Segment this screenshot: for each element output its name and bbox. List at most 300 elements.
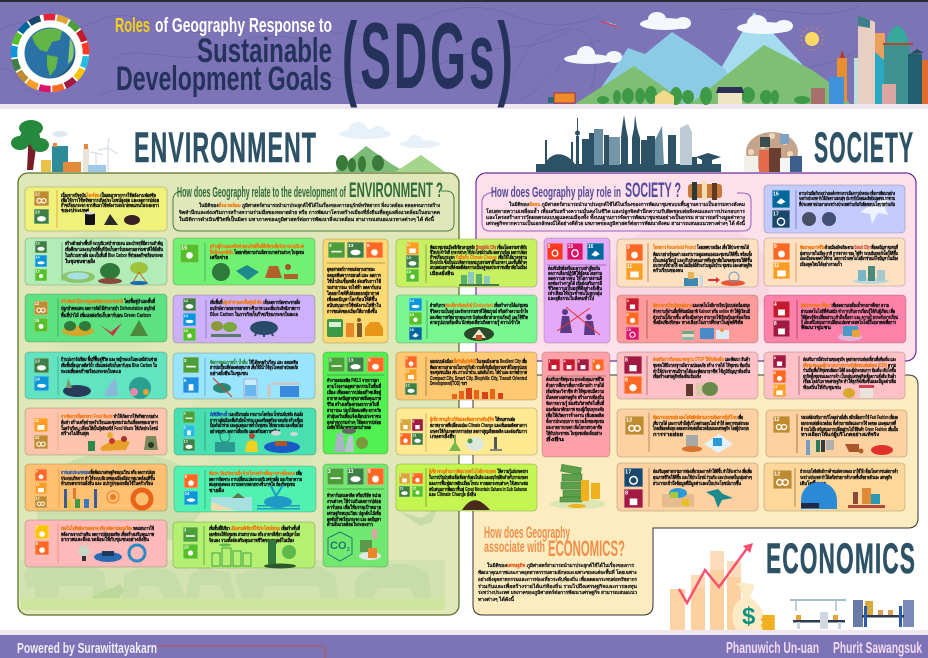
card: soil and desert: และการฟื้นฟูสภาพดินเสื่อมโทรม จากผลกระทบต่างๆ ให้เหมาะสม [429,478,528,488]
card: marine Blue Carbon: เพิ่มพื้นที่อนุบาลสัตว์น้ำ เพิ่มแหล่งกักเก็บคาร์บอน Blue Carbon ใน [61,360,157,369]
title [115,3,516,108]
card: Food Waste: ในครัวเรือน เปลี่ยนให้เป็นปุ๋ยอินทรีย์ Food Waste ให้เกิดประโยชน์ [61,424,158,432]
card: SDG 12 fossil resources: 12 [35,192,40,197]
card: disasters and climate: 6 [184,426,186,430]
card: Smart City: เมืองยุคใหม่ได้อย่างรวดเร็ว [800,260,842,268]
card: sustainable transport: ลดมลพิษจากรถยนต์ และ ลดการ [327,272,381,279]
card: Food Waste: การจัดการเรื่องอาหาร Food Waste ทำให้เกิดการใช้ทรัพยากรอย่าง [61,412,158,420]
card: Ecotourism: 15 [410,312,415,317]
card: beaches and marine: 9 [185,474,188,479]
card: Green Carbon forests: พื้นที่ป่าไม้ เพิ่มแหล่งกักเก็บคาร์บอน Green Carbon [61,310,151,319]
card: mangroves: 13 [184,298,189,303]
card: green cities: เพิ่มพื้นที่สีเขียว เมืองสวนสีเขียวที่ใช้ประโยชน์ทุกมุม เพื่อสร้างพื้นที่ [209,523,300,532]
card: soil and desert: 2 [400,473,402,477]
environment question: ในมิติของสิ่งแวดล้อม ภูมิศาสตร์สามารถนำมาประยุกต์ใช้ได้ในเรื่องของการอนุรักษ์ทรัพยากร สิ่งแวดล้อม ตลอดจนการสร้าง [199,201,441,210]
header banner [0,0,928,109]
card: community waste and market: เพื่อสร้างเศรษฐกิจท้องถิ่นเข้มแข็ง [653,372,701,380]
card: air pollution: ทำงานลดมลพิษ PM2.5 จากการเผา [327,377,379,384]
card: SDG 12 fossil resources: 13 [35,210,40,215]
card: Food Waste [25,408,167,455]
card: Blue Carbon wetlands: 13 [36,242,40,246]
card: Biophilic City: พัฒนาชุมชนเมืองสีเขียวตามหลัก Biophilic City เชื่อมโยงธรรมชาติกับ [430,243,527,251]
card: Green Carbon forests [25,294,167,342]
banner city skyline [829,15,928,104]
card: digital learning: พัฒนาระบบการศึกษา เพื่อลดความเหลื่อมล้ำทางการศึกษา ความ [801,300,889,309]
card: digital learning: พัฒนาชุมชน [801,324,832,331]
card: Blue Carbon wetlands: 15 [36,270,40,274]
card: sustainable transport: 9 [367,243,370,249]
card: mangroves: Blue Carbon ในการกักเก็บก๊าซเรือนกระจกในทะเล [210,310,298,318]
card: household project: 9 [627,245,630,251]
banner landscape illustration [548,12,850,105]
card: beaches and marine: ลดการกัดเซาะ การเปลี่ยนแปลงระบบนิเวศชายฝั่ง และรักษาความ [209,475,302,483]
card: renewable energy: พลังงานจากถ่านหิน ลดการปล่อยมลพิษ เพื่อสร้างเสริมคุณภาพ [61,530,154,538]
card: SDG 15 land use: สร้างผู้นำและเครือข่ายอนุรักษ์พื้นที่สีเขียวเพื่อรักษาระบบนิเวศ [210,241,305,251]
card: water and health: จัดการคุณภาพน้ำ น้ำดื่ม ใช้ได้ทุกครัวเรือน และ ลดมลพิษ [210,357,298,366]
card: Biophilic City: แบบผสมผสานที่ส่งผลดีต่อความเป็นอยู่ของประชาชนที่อาศัยในเมือง [430,263,527,272]
economics question: ร่วมกันและเพื่อสร้างรายได้แก่ท้องถิ่น รวมไปถึงเศรษฐกิจและการลงทุน [478,582,638,590]
card: renewable energy [25,520,167,567]
card: education and work: ให้กับประชาชน ในชุมชนท้องถิ่นอย่าง [546,429,602,437]
card: peace and institutions: 17 [773,211,779,217]
card: SDG 15 land use: เครือข่าย [210,254,228,261]
card: soil and desert: 15 [413,486,416,490]
card: disasters and climate: 3 [184,412,186,416]
card: Green Fashion: 12 [774,417,780,423]
card: community waste and market [617,352,758,399]
card: Resilient City: 11 [406,370,409,374]
economics question: ทางต่างๆ ได้ดังนี้ [478,594,515,603]
card: circular economy and recycling [25,464,167,511]
title: Roles [115,15,150,37]
card: gender and inequality: เท่าเทียมให้ประชาชนในทุกกลุ่ม [548,290,602,297]
environment question: จิตสำนึกและส่งเสริมการสร้างความร่วมมือของหลายฝ่าย หรือ การพัฒนาโครงสร้างเมืองที่ยั่งยืนเพื่อดูแลสิ่งแวดล้อมในอนาคต [179,208,440,217]
card: global trade: 12 [774,472,780,478]
card: Biophilic City: เมืองยั่งยืน [430,269,455,277]
card: household project [617,239,758,287]
card: ASEAN and trade geography [617,463,758,511]
icon: money bag and coins [732,583,775,630]
icon: mountains and clouds [335,122,445,172]
card: Resilient City: Compact City, Smart City, Biophilic City, Transit Oriented [430,376,527,382]
card: climate research: เกษตรให้กับเกษตรกรรายย่อย ลดการสูญเสียผลผลิต และส่งเสริมการ [430,428,527,436]
card: global trade: เติบโตขึ้นมาก [800,478,826,487]
card: marine Blue Carbon [25,352,167,399]
card: beaches and marine: พัฒนา ป้องกันชายฝั่ง ด้วยโครงสร้างพื้นฐานชายฝั่งทะเล เพื่อ [209,468,302,477]
card: Ecotourism [396,295,537,343]
card: SDG 12 fossil resources: เพื่อให้การใช้ทรัพยากรเกิดประโยชน์สูงสุด และลดการปล่อย [61,196,159,205]
card: carbon neutrality: 2 [347,547,350,553]
card: CSR and community business: ท้องถิ่นให้กับชุมชน [803,383,842,391]
footer bar: Powered by Surawittayakarn [17,640,157,657]
card: air pollution: ชีวิต สร้างเครื่องกรองอากาศในที่ [327,400,380,408]
card: air pollution [323,352,388,454]
card: community waste and market: ทำให้ประชาชนมีรายได้และพัฒนาอาชีพ ใช้ภูมิปัญญาท้องถิ่น [653,367,750,376]
card: disasters and climate: ป้องกันน้ำท่วม และดูแลคุณภาพน้ำในชุมชน ให้เหมาะสม และเชื่อมโยง [210,420,303,430]
card: ASEAN and trade geography: 17 [625,470,631,476]
card: CSR and community business: 9 [774,370,777,375]
card: air pollution: มลพิษให้ได้มาตรฐานตามกำหนด [327,424,371,431]
card: carbon neutrality: ดูดซับก๊าซเรือนกระจก และ ลดปัญหา [327,516,381,524]
card: SDG 12 fossil resources [25,187,167,231]
environment question: How does Geography relate to the development of [177,184,346,201]
card: peace and institutions: 16 [773,191,779,197]
card: Green Fashion: ทางเลือกให้แก่ผู้บริโภคอย่างแท้จริง [801,431,880,439]
card: Biophilic City [396,239,537,287]
card: household project: พัฒนาอย่างรู้คุณค่า และสามารถดูแลตนเองและชุมชนให้ดีขึ้น พร้อมทั้ง [653,249,752,259]
card: Blue Carbon wetlands: ในชุมชนชายฝั่ง [65,257,95,265]
card: Smart City: 9 [774,244,777,250]
card: ASEAN and trade geography: สามารถเข้าถึงข้อมูลที่มีมูลค่าและเป็นประโยชน์มากขึ้น [653,478,741,488]
card: renewable energy: เทคโนโลยีพลังงานสะอาด หรือ พลังงานหมุนเวียน ทดแทนการใช้ [61,525,154,532]
card: carbon neutrality: ด้านสิ่งแวดล้อมในระยะยาว [327,520,373,528]
card: Biophilic City: 15 [407,269,412,274]
card: CSR and community business: เพื่อชุมชนและผู้ประกอบการความรับผิดชอบต่อสังคม (CSR) ความ [803,361,896,370]
card: CSR and community business: เชื่อมโยงกับภาคเศรษฐกิจ ทำให้ธุรกิจเพิ่มขึ้นและมีมูลค่าเพิ่ม [803,376,896,386]
card: Ecotourism: และจัดการทรัพยากรคุณภาพ นักท่องเที่ยวสามารถเรียนรู้ และใช้ชีวิต [430,313,528,322]
card: Ecotourism: 14 [410,298,415,303]
footer bar: Phanuwich Un-uan [726,640,819,657]
footer bar [0,630,928,658]
card: sustainable transport: เพื่อลดปัญหาโลกร้อนให้ดีขึ้น [327,294,377,303]
card: production and logistics: เพิ่มรายได้ และการเข้าถึงผู้บริโภคผ่านออนไลน์ ทำให้ ลดการขนส่งระยะ [653,419,749,428]
icon: money bag and coins: $ [742,603,756,630]
card: circular economy and recycling: การแยกประเภทขยะเพื่อพัฒนาเศรษฐกิจหมุนเวียน หรือ ลดการปล่อย [61,468,155,476]
card: sustainable transport: สนับสนุนการใช้พลังงานไฟฟ้าใน [327,302,381,309]
card: carbon neutrality: คาร์บอน เพื่อให้บรรลุเป้าหมาย [327,503,381,511]
card: climate research: 13 [413,433,416,438]
card: education technology: ทั้งยังเพิ่มทักษะ ทางเลือกในการศึกษาในยุคดิจิทัล [653,317,743,326]
card: mangroves: เพิ่มพื้นที่ปลูกป่าชายเลนฟื้นฟูหน้าดิน เพื่อลดการกัดเซาะชายฝั่ง [210,297,300,307]
card: Food Waste: สร้างไม่สิ้นสุด [61,428,89,437]
card: Biophilic City: 11 [407,242,412,247]
economics question: How does Geography [484,523,570,542]
card: community waste and market: ชุมชนให้มีมาตรฐานมีความปลอดภัย สร้าง รายได้ ให้ชุมชน ท้องถิ่น [653,361,750,369]
card: education and work: และพัฒนาศักยภาพ ของผู้เรียนทุกระดับ [546,406,604,414]
card: marine Blue Carbon: บ้านปะการังเทียม พื้นที่ฟื้นฟูชีวิต และ หญ้าทะเลในทะเลมีส่วนช่วย [61,354,157,364]
card: SDG 12 fossil resources: ก๊าซเรือนกระจก ควรหันมาใช้พลังงานสะอาดทดแทนในระยะยาว [61,202,159,209]
card: education and work: ทั้งการประกอบการ ขนาดเล็กของชุมชน [546,416,604,425]
card: Green Fashion [766,410,907,457]
card: water and health: 6 [184,378,187,384]
card: sustainable transport: 13 [348,243,354,249]
card: climate research: สภาพอากาศที่เปลี่ยนแปลง Climate Change และเพิ่มผลผลิตทางการ [430,421,527,429]
card: circular economy and recycling: 12 [36,497,40,501]
chart: rising economy bars and arrow [670,543,753,630]
card: global trade [764,463,905,511]
card: CSR and community business: 11 [774,384,779,389]
card: beaches and marine [174,466,316,512]
card: education and work: เพิ่มทักษะวิชาชีพ ทำให้ชุมชนมีความ [546,387,604,395]
environment question: ENVIRONMENT ? [349,179,443,202]
card: household project: เป็นแหล่งเรียนรู้ และปรับปรุงคุณภาพที่อยู่อาศัยในเขตชุมชนให้ดีขึ้น [653,255,752,265]
card: education and work: เพื่อให้เกิดการจ้างงาน เพิ่มผลผลิต [546,411,604,419]
card: sustainable transport [323,239,388,343]
card: education and work: ด้วยการศึกษาเพื่อการมีงานทำ รายได้ [546,381,604,389]
card: production and logistics: ไกลเพื่อลดต้นทุน ลดผลกระทบต่อสิ่งแวดล้อมและเศรษฐกิจ โดยผู้ประกอบ [652,424,749,433]
card: gender and inequality: ลดความยากจน ให้โอกาสงานดี [548,275,602,282]
card: education and work: 1 [549,360,551,364]
card: Biophilic City: Biophilia ซึ่งเป็นแนวคิดการออกแบบธรรมชาติในอาคาร และพื้นที่ต่างๆ [430,257,527,266]
card: carbon neutrality [323,464,388,567]
card: climate research: ผู้เชี่ยวชาญด้านวิจัยและพัฒนาสายพันธุ์พืช ให้ทนทานต่อ [430,415,515,424]
card: air pollution: ค่าฝุ่นควันเพื่อแจ้งเตือนประชาชน [327,412,381,420]
card: renewable energy: อากาศและสิ่งแวดล้อมให้กับชุมชนอย่างยั่งยืน [61,535,150,543]
card: education technology: 10 [627,327,631,332]
card: Ecotourism: 16 [410,327,415,332]
card: air pollution: สาธารณะ ปลูกไม้ลดมลพิษ ตรวจวัด [327,407,381,415]
society question: เศรษฐกิจจากความเป็นเอกลักษณ์ได้อย่างดีด้วย มหภาคของภูมิศาสตร์ต่อการพัฒนาสังคม สามารถเสนอแนวทางต่างๆ ได้ ดังนี้ [486,218,746,228]
card: Smart City: พัฒนาคุณภาพชีวิตด้วยเมืองอัจฉริยะตาม Smart City เพื่อลดปัญหาชุมชนที่ [800,243,898,251]
card: green cities: ออกซิเจนให้กับชุมชน สวนสาธารณะ หรือ อาคารสีเขียว ลดปัญหาโลก [209,531,300,538]
icon: money and gold coins [550,464,606,509]
card: air pollution: ตามโรงงานอุตสาหกรรมในพื้นที่ [327,381,382,390]
card: Food Waste: 11 [35,418,40,423]
card: gender and inequality: 5 [548,244,551,250]
card: education technology [617,295,758,343]
card: sustainable transport: รถสาธารณะ รถไฟฟ้า ลดคาร์บอน [327,284,381,291]
title: of Geography Response to [155,15,332,37]
card: disasters and climate: ภัยพิบัติทางน้ำ และปริมาณฝน จากภาวะโลกร้อน น้ำท่วมฉับพลัน ฝนแล้ง [210,409,303,418]
card: air pollution: 3 [329,358,332,363]
card: gender and inequality: 16 [588,244,594,250]
panel: society [476,173,916,361]
card: education technology: ส่วนร่วมได้มากขึ้น เครื่องมือต่างๆ สามารถใช้เรียนรู้นอกห้องเรียน [653,312,750,322]
card: community waste and market: ส่งเสริมการรับรองมาตรฐาน OTOP ให้กับท้องถิ่น และพัฒนา สินค้า [653,355,750,363]
icon: factory lines [790,599,914,629]
card: disasters and climate: อย่างชุมชน ลดการเสี่ยงภัย และเตรียมความพร้อม [210,427,280,435]
card: CSR and community business [764,352,905,399]
society question: และโครงสร้างการวัดผลตรงแบบดูแลคนเมืองทั้ง ทั้งบนฐานการจัดการพัฒนาชุมชนอย่างเป็นธรรม สามารถสร้างมูลค่าทาง [486,212,746,222]
card: soil and desert: 9 [413,473,415,477]
card: peace and institutions [764,185,905,233]
card: Green Carbon forests: ปลูกป่าทดแทน ลดการตัดไม้ทำลายป่า Deforestation อนุรักษ์ [61,305,155,313]
panel: economics [473,375,918,615]
card: Resilient City: พัฒนาความสามารถในการปรับตัว รวมทั้งรับมือภัยธรรมชาติในทุกรูปแบบ [430,362,527,372]
card: Food Waste: 12 [35,435,40,440]
card: soil and desert: และ Climate Change ยั่งยืน [429,490,476,498]
icon: crowd of people [744,132,802,172]
card: education technology: พัฒนาการเรียนรู้ทุกกลุ่มอายุ และเทคโนโลยีการเรียนรู้แบบต่อเนื่องสนุก [653,301,750,310]
card: education and work [542,352,610,457]
card: green cities [173,522,315,568]
card: green cities: 15 [184,545,189,550]
card: gender and inequality: และยุติธรรมในสังคมทั่วไป [548,294,594,302]
card: soil and desert: ในการปรับปรุงดินเพื่อเพิ่มคาร์บอนในดิน และอนุรักษ์ดินสำหรับการเกษตร [429,473,528,481]
card: circular economy and recycling: 9 [36,470,38,474]
society question: โอบสลายความเหลื่อมล้ำ เพื่อเสริมสร้างความมั่นคงในชีวิต และปลูกจิตสำนึกความรับผิดชอบต่อสังคมและการประกอบการ [485,206,745,216]
heading: ENVIRONMENT: ENVIRONMENT [134,124,317,172]
environment question: ในมิติการดำเนินชีวิตที่เป็นมิตร มหาภาคของภูมิศาสตร์ต่อการพัฒนาสิ่งแวดล้อม สามารถเสนอแนวทางต่างๆ ได้ ดังนี้ [179,214,435,224]
card: air pollution: อากาศ ลดปัญหาสุขภาพเพิ่มคุณภาพ [327,394,381,402]
card: mangroves: 15 [184,328,189,333]
card: climate research [396,408,537,455]
card: mangroves: 14 [184,313,189,318]
card: mangroves: อนุรักษ์ความหลากหลายทางชีวภาพ และเพิ่มประสิทธิภาพการ [210,304,300,312]
card: household project: แนวทางนี้ช่วยให้ คนในเมืองมีส่วนร่วมดูแลบ้าน ชุมชน และเศรษฐกิจ [653,260,752,270]
card: ASEAN and trade geography: 8 [625,491,628,497]
card: education technology: 4 [627,298,630,303]
society question: SOCIETY ? [625,179,681,202]
environment question [173,179,454,231]
card: gender and inequality: ส่งเสริมสิทธิสตรีและความเท่าเทียมกัน [548,265,600,272]
card: community waste and market: 8 [625,357,628,363]
card: education and work: ยั่งยืน [546,435,565,443]
economics question [478,523,638,603]
card: production and logistics: การรายย่อย [653,431,683,438]
card: SDG 15 land use [173,238,315,285]
card: beaches and marine: ชายฝั่ง [209,486,225,494]
card: air pollution: 9 [368,358,371,363]
card: water and health: อย่างยั่งยืนในชุมชน [210,369,249,377]
card: production and logistics: พัฒนาระบบขนส่ง และโลจิสติกส์ตามความต้องการผู้บริโภค เพื่อ [653,413,743,422]
card: Ecotourism: สำหรับการท่องเที่ยวเชิงอนุรักษ์ (Ecotourism) เพื่อสร้างรายได้แก่ชุมชน [430,301,528,309]
card: carbon neutrality: เศรษฐกิจหมุนเวียน ปลูกต้นไม้เพื่อ [327,509,381,518]
card: education and work: และภาคการเกษตร เพิ่มโอกาสทางอาชีพ [546,423,602,431]
icon: skyline silhouette [536,115,721,172]
card: beaches and marine: 14 [185,491,190,496]
economics question: พัฒนาคุณภาพและภาคอุตสาหกรรมตามลักษณะเฉพาะของแต่ละพื้นที่ โดยเฉพาะ [478,567,637,576]
card: air pollution: อุตสาหกรรมต่างๆ ให้ลดการปล่อย [327,419,381,426]
society question: ในมิติของสังคม ภูมิศาสตร์สามารถนำมาประยุกต์ใช้ได้ในเรื่องของการพัฒนาชุมชนบนพื้นฐานความเป็นธรรมทางสังคม [509,199,745,209]
card: carbon neutrality: 13 [348,469,354,475]
card: Blue Carbon wetlands: สร้างตัวอย่างพื้นที่ ระบบนิเวศป่าชายเลน และป่าพรุที่มีความสำคัญ [65,238,164,247]
card: Blue Carbon wetlands: เพื่อศึกษาและอนุรักษ์พื้นที่กักเก็บคาร์บอนตามธรรมชาติให้ยั่งยืน [65,244,163,253]
card: Green Carbon forests: สร้างจิตสำนึกการดูแลทรัพยากรธรรมชาติ โดยฟื้นฟูป่าและพื้นที่ [61,296,155,306]
icon: SDG globe [0,2,101,104]
card: carbon neutrality: ทำคาร์บอนเครดิต หรือบริษัท หน่วย [327,492,381,499]
card: Resilient City: 9 [406,357,408,361]
card: sustainable transport: 3 [329,243,332,249]
card: renewable energy: 7 [36,525,39,530]
card: disasters and climate: 13 [184,440,188,444]
card: Smart City [764,238,905,286]
card: carbon neutrality: 3 [328,469,331,475]
society question [482,179,751,231]
title: (SDGs) [342,3,516,108]
card: soil and desert: 13 [400,486,403,490]
card: Resilient City: ออกแบบผังเมืองเพื่อรับมือภัยพิบัติในเขตเมืองตาม Resilient City เพื่อ [430,357,527,365]
card: marine Blue Carbon: 14 [35,377,40,382]
card: circular economy and recycling: ทำเกษตรกรรมยั่งยืน และ แปรรูปของเหลือใช้ในครัวเรือน [61,479,153,488]
card: digital learning: 4 [774,302,777,308]
card: production and logistics: 12 [626,418,632,424]
card: SDG 15 land use: พื้นที่เกษตรยั่งยืน โดยอาศัยความร่วมมือจากภาคส่วนต่างๆ ในชุมชน [210,247,304,256]
economics question: associate with [484,539,545,556]
card: gender and inequality: ลดช่องว่างรายได้ เพื่อส่งเสริมการมี [548,279,602,287]
card: Blue Carbon wetlands [25,238,167,285]
card: water and health: 3 [184,358,187,364]
card: climate research: 8 [413,419,414,424]
card: marine Blue Carbon: ทะเลเพื่อลดก๊าซเรือนกระจกในทะเล [61,367,121,375]
card: sustainable transport: ใช้น้ำมันเชื้อเพลิง ส่งเสริมการใช้ [327,276,381,285]
card: Blue Carbon wetlands: 14 [36,256,40,260]
card: water and health: สารปนเปื้อนที่ส่งผลต่อสุขภาพ เพื่อให้มีน้ำใช้อุปโภคอย่างปลอดภัย [210,362,298,371]
card: Resilient City: Development(TOD) ฯลฯ [430,381,467,387]
card: Food Waste: คุ้มค่า สร้างเครือข่ายครัวเรือนและชุมชนร่วมกันเพื่อลดขยะอาหาร [61,418,158,426]
card: gender and inequality: ชีวิตความเป็นอยู่ที่ดีอย่างยั่งยืน [548,284,602,293]
card: sustainable transport: ไดออกไซด์ที่ปล่อยออกสู่อากาศ [326,289,380,298]
card: household project: ครัวเรือนของตน [653,267,683,274]
card: green cities: ร้อนลง รวมทั้งส่งเสริมคุณภาพชีวิตของมนุษย์ในเมือง [209,535,294,544]
card: Ecotourism: ชีวิตความเป็นอยู่ และรักษาธรรมชาติให้สมบูรณ์ หรือสร้างความเข้าใจ [430,307,528,316]
card: education and work: 4 [564,360,566,364]
title: Sustainable [197,32,332,70]
card: carbon neutrality: 9 [368,469,371,475]
card: Ecotourism: ตามรูปแบบท้องถิ่น นักท่องเที่ยวเกิดความรู้ ความเข้าใจ [430,318,520,327]
card: soil and desert: ผู้เชี่ยวชาญด้านการพัฒนาเทคโนโลยีการเกษตร ให้ความรู้แก่เกษตรกร [429,467,528,476]
card: community waste and market: 9 [625,377,628,383]
card: soil and desert: สนับสนุนการพัฒนาฟื้นฟู Great Mountain Sahara in Sub Saharan [429,484,527,494]
card: Smart City: 11 [774,263,779,269]
card: Biophilic City: 13 [407,255,412,260]
card: sustainable transport: การขนส่งของเมืองให้มากยิ่งขึ้น [327,306,377,315]
card: ASEAN and trade geography: คุณภาพชีวิตให้ดีขึ้น และใช้ประโยชน์ ร่วมกัน และประเทศในกลุ่มต่างๆ [653,472,752,481]
card: Biophilic City: ชีวิตประจำวันที่ อาคารต่างๆ ใช้ประโยชน์ร่วมกัน ลดความร้อน ลดการปล่อย [430,248,527,256]
icon: tree and factory [11,120,118,172]
card: Green Carbon forests: 15 [35,318,40,323]
card: disasters and climate: การวางผังเมืองเพื่อรับมือน้ำท่วม และเตรียมพร้อม หลบภัย สร้างเขื่อน [210,415,303,424]
card: gender and inequality: ลดการเลือกปฏิบัติให้สังคมโดยรวม [548,270,602,277]
economics question: ในมิติของเศรษฐกิจ ภูมิศาสตร์สามารถนำมาประยุกต์ใช้ได้ในเรื่องของการ [487,561,634,570]
card: production and logistics [617,409,758,457]
card: carbon neutrality: งานต่างๆ ให้ร่วมกันลดการปล่อย [327,498,381,505]
card: green cities: 3 [184,528,187,533]
card: education and work: มั่นคงทางเศรษฐกิจ สร้างงานท้องถิ่น [546,393,604,401]
card: CSR and community business: 8 [774,355,777,360]
economics question: ECONOMICS? [548,536,625,561]
card: air pollution: 13 [348,358,354,363]
icon: clouds, sun and plane [564,12,823,64]
card: education and work: 9 [593,360,595,364]
card: Blue Carbon wetlands: ในบริเวณชายฝั่ง และเป็นพื้นที่ Blue Carbon ที่ช่วยลดก๊าซเรือนกระจก [65,250,163,259]
card: SDG 12 fossil resources: เนื่องจากปัจจุบันโลกร้อน เป็นผลมาจากการใช้พลังงานฟอสซิล [61,191,156,199]
card: Green Carbon forests: 12 [35,301,40,306]
card: renewable energy: 9 [36,541,39,546]
card: soil and desert [396,464,537,511]
card: circular economy and recycling: ประกอบกิจการ ทำให้ระบบนิเวศของเมืองมีสภาพแวดล้อมดีขึ้น [61,473,155,482]
economics question: ระหว่างประเทศ มหภาคของภูมิศาสตร์ต่อการพัฒนาเศรษฐกิจ สามารถเสนอแนว [478,589,637,597]
card: digital learning [764,295,906,343]
card: Biophilic City: ก๊าซเรือนกระจก รับมือกับ Climate Change เพื่อให้ได้มาตรฐาน [430,253,527,261]
card: education technology: ทำความรู้ผ่านสื่อที่ทันสมัยอาทิ Kahoot หรือ online ทำให้ผู้เรียนมี [653,307,750,316]
card: disasters and climate [174,408,316,455]
card: climate research: เกษตรยั่งยืน [430,432,457,440]
card: mangroves [173,295,315,343]
card: household project: โครงการ Household Project โดยเทศบาลเมือง เพื่อให้ประชาชนได้ [652,243,749,251]
card: beaches and marine: สมดุลของทะเล ความหลากหลายทางชีวภาพใน ท้องถิ่นชุมชน [209,480,295,488]
card: Resilient City: 13 [406,384,410,388]
economics question: อย่างยิ่งอุตสาหกรรมและการท่องเที่ยวระดับท้องถิ่น เพื่อลดผลกระทบต่อทรัพยากร [478,575,637,583]
card: carbon neutrality: CO [330,540,347,552]
card: climate research: 2 [401,419,402,424]
card: marine Blue Carbon: 13 [35,359,40,364]
card: climate research: 9 [401,433,402,438]
card: gender and inequality: 10 [568,244,573,250]
card: air pollution: เมือง เพื่อลดการปล่อยก๊าซเสียสู่ [327,388,382,397]
card: ASEAN and trade geography: ส่งเสริมอุตสาหกรรมการท่องเที่ยวและการค้าให้ดีขึ้น ทำให้ระหว่าง เพื่อเพิ่ม [653,466,752,475]
card: digital learning: 8 [774,321,777,327]
society question: How does Geography play role in [491,184,621,201]
title: Development Goals [116,60,332,98]
panel: environment [18,173,459,615]
card: SDG 12 fossil resources: ของประเทศ [61,207,90,214]
card: sustainable transport: ยุทธศาสตร์การขนส่งยานพาหนะ [327,266,375,273]
card: education and work: จัดการความรู้ ส่งเสริมวิสาหกิจในพื้นที่ [546,398,604,408]
card: gender and inequality [544,238,610,343]
card: circular economy and recycling: 11 [36,483,39,487]
card: water and health [173,353,315,399]
